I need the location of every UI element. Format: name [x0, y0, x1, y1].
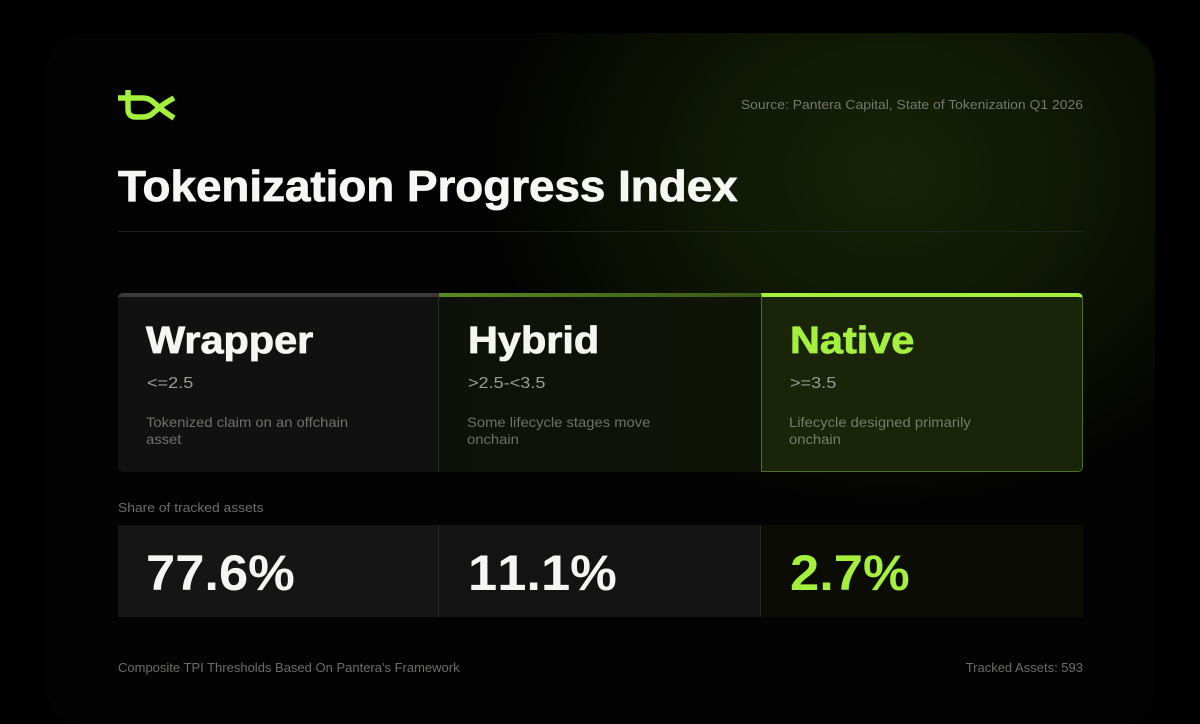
native range: >=3.5 [790, 375, 836, 392]
share label: Share of tracked assets [118, 500, 264, 515]
header divider [118, 231, 1083, 232]
source note: Source: Pantera Capital, State of Tokenization Q1 2026 [741, 97, 1083, 112]
hybrid name: Hybrid [468, 320, 599, 362]
native description: Lifecycle designed primarily onchain [789, 414, 971, 447]
hybrid range: >2.5-<3.5 [468, 375, 545, 392]
icon: tx logo [118, 90, 176, 120]
panel: wrapper [118, 293, 439, 472]
hybrid description: Some lifecycle stages move onchain [467, 414, 650, 447]
hybrid share value: 11.1% [468, 545, 617, 601]
hybrid share cell [439, 525, 761, 617]
native share cell [761, 525, 1083, 617]
panel: share row [118, 525, 1083, 617]
wrapper share value: 77.6% [146, 545, 295, 601]
footnote left: Composite TPI Thresholds Based On Pantera's Framework [118, 660, 460, 675]
native share value: 2.7% [790, 545, 910, 601]
wrapper range: <=2.5 [147, 375, 193, 392]
panel: hybrid [439, 293, 761, 472]
panel: tier cards [118, 293, 1083, 472]
native name: Native [790, 320, 914, 362]
footnote right: Tracked Assets: 593 [966, 660, 1083, 675]
wrapper description: Tokenized claim on an offchain asset [146, 414, 348, 447]
title: Tokenization Progress Index [118, 162, 738, 211]
wrapper share cell [118, 525, 439, 617]
wrapper name: Wrapper [146, 320, 313, 362]
panel: native [761, 293, 1083, 472]
